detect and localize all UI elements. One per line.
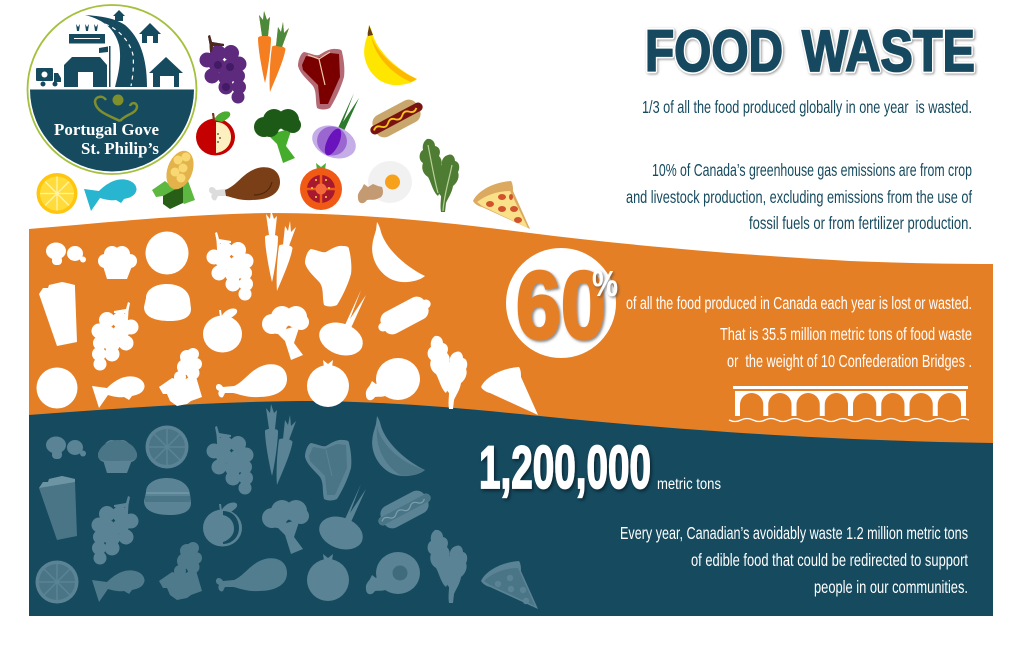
silhouette: drumstick: [216, 364, 287, 397]
silhouette: citrus top: [146, 232, 188, 274]
faded: corn: [159, 542, 202, 600]
silhouette: muffin: [98, 246, 137, 279]
silhouette: hot dog: [373, 291, 436, 340]
logo name: Portugal Gove: [54, 120, 159, 139]
logo: Portugal Cove St. Philip's badge: [28, 5, 196, 174]
silhouette: pizza: [481, 367, 538, 415]
food: banana: [364, 25, 417, 85]
faded: grapes lower: [92, 496, 138, 564]
silhouette: mushrooms: [46, 242, 86, 265]
fact: greenhouse gas: [626, 160, 972, 233]
food: kale: [420, 139, 459, 212]
fact: 60 percent details: [626, 293, 972, 371]
silhouette: apple: [203, 308, 242, 352]
silhouette: burger: [144, 284, 191, 321]
fact: edible food: [620, 523, 968, 597]
title: [645, 19, 975, 84]
food: carrots: [258, 11, 289, 92]
silhouette: carrots: [265, 210, 296, 291]
logo swirl emblem: [95, 94, 137, 121]
stat unit: metric tons: [657, 476, 721, 493]
stat: 1,200,000: 1,200,000: [479, 434, 651, 501]
logo lower half: [30, 90, 194, 171]
icon: bridge: [729, 386, 969, 422]
faded: steak: [305, 440, 351, 500]
food: grapes: [200, 35, 246, 104]
silhouette: kale: [428, 336, 467, 409]
faded: kale: [428, 530, 467, 603]
silhouette: corn: [159, 348, 202, 406]
stat: 60 percent: 60: [516, 252, 606, 359]
silhouette: tomato: [307, 360, 349, 407]
food: steak: [298, 49, 344, 110]
band: orange: [29, 213, 993, 450]
food: broccoli: [254, 109, 301, 163]
stat: 60 percent: %: [592, 263, 618, 304]
food: onion: [308, 93, 360, 164]
silhouette: cup: [39, 282, 77, 346]
food: lemon: [36, 173, 78, 214]
title: WASTE: [802, 19, 975, 84]
faded: apple: [203, 502, 242, 546]
faded: grapes: [206, 426, 254, 494]
faded: pizza: [481, 561, 538, 609]
faded: carrots: [265, 404, 296, 485]
faded food silhouettes on blue band: [36, 404, 538, 609]
food: egg: [358, 161, 412, 203]
faded: hot dog: [373, 485, 436, 534]
silhouette: fish: [92, 376, 145, 408]
food: apple: [196, 111, 235, 156]
food: pizza: [473, 181, 530, 229]
faded: burger: [144, 478, 191, 515]
faded: egg: [366, 552, 420, 594]
faded: citrus top: [146, 426, 188, 468]
faded: muffin: [98, 440, 137, 473]
title: WASTE: [802, 19, 975, 84]
logo name line 2: St. Philip’s: [81, 139, 160, 158]
food: corn: [152, 147, 199, 209]
food: fish: [84, 179, 137, 211]
food: tomato: [300, 163, 342, 210]
food: hot dog: [365, 94, 428, 143]
faded: banana: [372, 416, 425, 476]
food: drumstick: [209, 167, 280, 200]
fact: edible food: people in our communities.: [814, 577, 968, 597]
faded: citrus lower: [36, 560, 78, 604]
title: FOOD: [645, 19, 783, 84]
band: dark blue: [29, 401, 993, 616]
faded: tomato: [307, 554, 349, 601]
white food silhouettes on orange band: [36, 210, 538, 415]
logo farm and town scene: [36, 10, 183, 87]
silhouette: onion: [315, 290, 367, 361]
faded: drumstick: [216, 558, 287, 591]
silhouette: citrus lower: [36, 368, 78, 408]
faded: cup: [39, 476, 77, 540]
title: FOOD: [645, 19, 783, 84]
silhouette: broccoli: [262, 306, 309, 360]
silhouette: grapes: [206, 232, 254, 300]
faded: onion: [315, 484, 367, 555]
faded: fish: [92, 570, 145, 602]
silhouette: steak: [305, 246, 351, 306]
faded: mushrooms: [46, 436, 86, 459]
silhouette: grapes lower: [92, 302, 138, 370]
silhouette: egg: [366, 358, 420, 400]
silhouette: banana: [372, 222, 425, 282]
faded: broccoli: [262, 500, 309, 554]
